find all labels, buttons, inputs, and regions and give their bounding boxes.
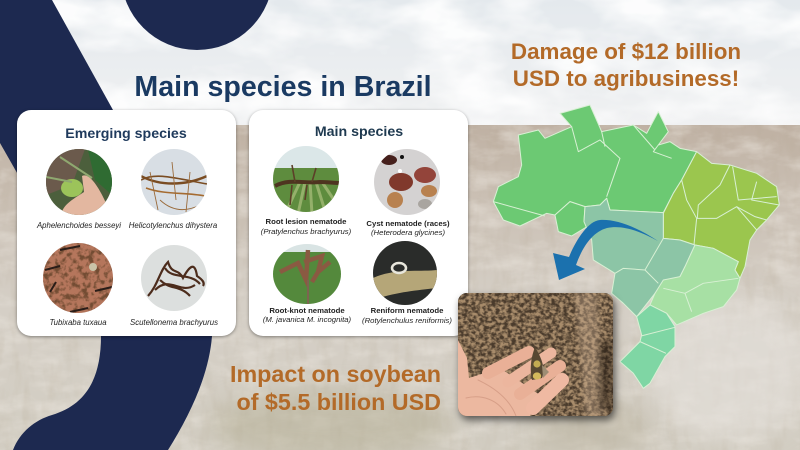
heading: main species: Main species [315,124,403,140]
photo: Helicotylenchus dihystera [141,149,207,215]
label: root-knot nematode [263,306,352,324]
map of Brazil [493,105,779,388]
label: Scutellonema brachyurus: Scutellonema brachyurus [130,318,218,327]
label: reniform nematode [362,306,452,325]
label: reniform nematode: Reniform nematode [371,306,444,315]
label: cyst nematode [366,219,450,237]
callout: damage to agribusiness [511,39,741,91]
palm and fingers of the hand [458,340,562,416]
label: Tubixaba tuxaua: Tubixaba tuxaua [49,318,107,327]
label: root lesion nematode: Root lesion nematode [266,217,347,226]
soybean pod [531,347,549,380]
region: North [493,105,697,236]
callout: damage to agribusiness: Damage of $12 billion [511,39,741,64]
region: Northeast [663,152,779,278]
photo: root lesion nematode [273,146,339,214]
photo: Aphelenchoides besseyi [46,149,112,216]
photo: soybean pod in hand [458,293,613,416]
label: root-knot nematode: Root-knot nematode [269,306,345,315]
label: Aphelenchoides besseyi: Aphelenchoides besseyi [36,221,121,230]
photo: root-knot nematode [273,244,341,304]
photo: Scutellonema brachyurus [141,245,207,311]
label: root lesion nematode [261,217,352,236]
region: South [620,305,675,388]
panel: emerging species [17,110,236,336]
callout: impact on soybean [230,361,441,415]
callout: damage to agribusiness: USD to agribusiness! [513,66,739,91]
region: Southeast [650,245,740,325]
label: cyst nematode: Cyst nematode (races) [366,219,450,228]
label: reniform nematode: (Rotylenchulus reniformis) [362,316,452,325]
photo: Tubixaba tuxaua [43,243,113,313]
label: Helicotylenchus dihystera: Helicotylenchus dihystera [129,221,218,230]
panel: main species [249,110,468,336]
photo: cyst nematode [374,149,440,215]
photo: reniform nematode [373,241,437,305]
callout: impact on soybean: Impact on soybean [230,361,441,387]
label: root lesion nematode: (Pratylenchus brachyurus) [261,227,352,236]
region: Center-West [584,198,695,317]
arrow: blue curved arrow [553,220,658,280]
label: cyst nematode: (Heterodera glycines) [371,228,445,237]
decorative navy logo shape [0,0,273,450]
callout: impact on soybean: of $5.5 billion USD [236,389,441,415]
title: Main species in Brazil [134,71,432,103]
heading: emerging species: Emerging species [65,126,187,142]
label: root-knot nematode: (M. javanica M. incognita) [263,315,352,324]
